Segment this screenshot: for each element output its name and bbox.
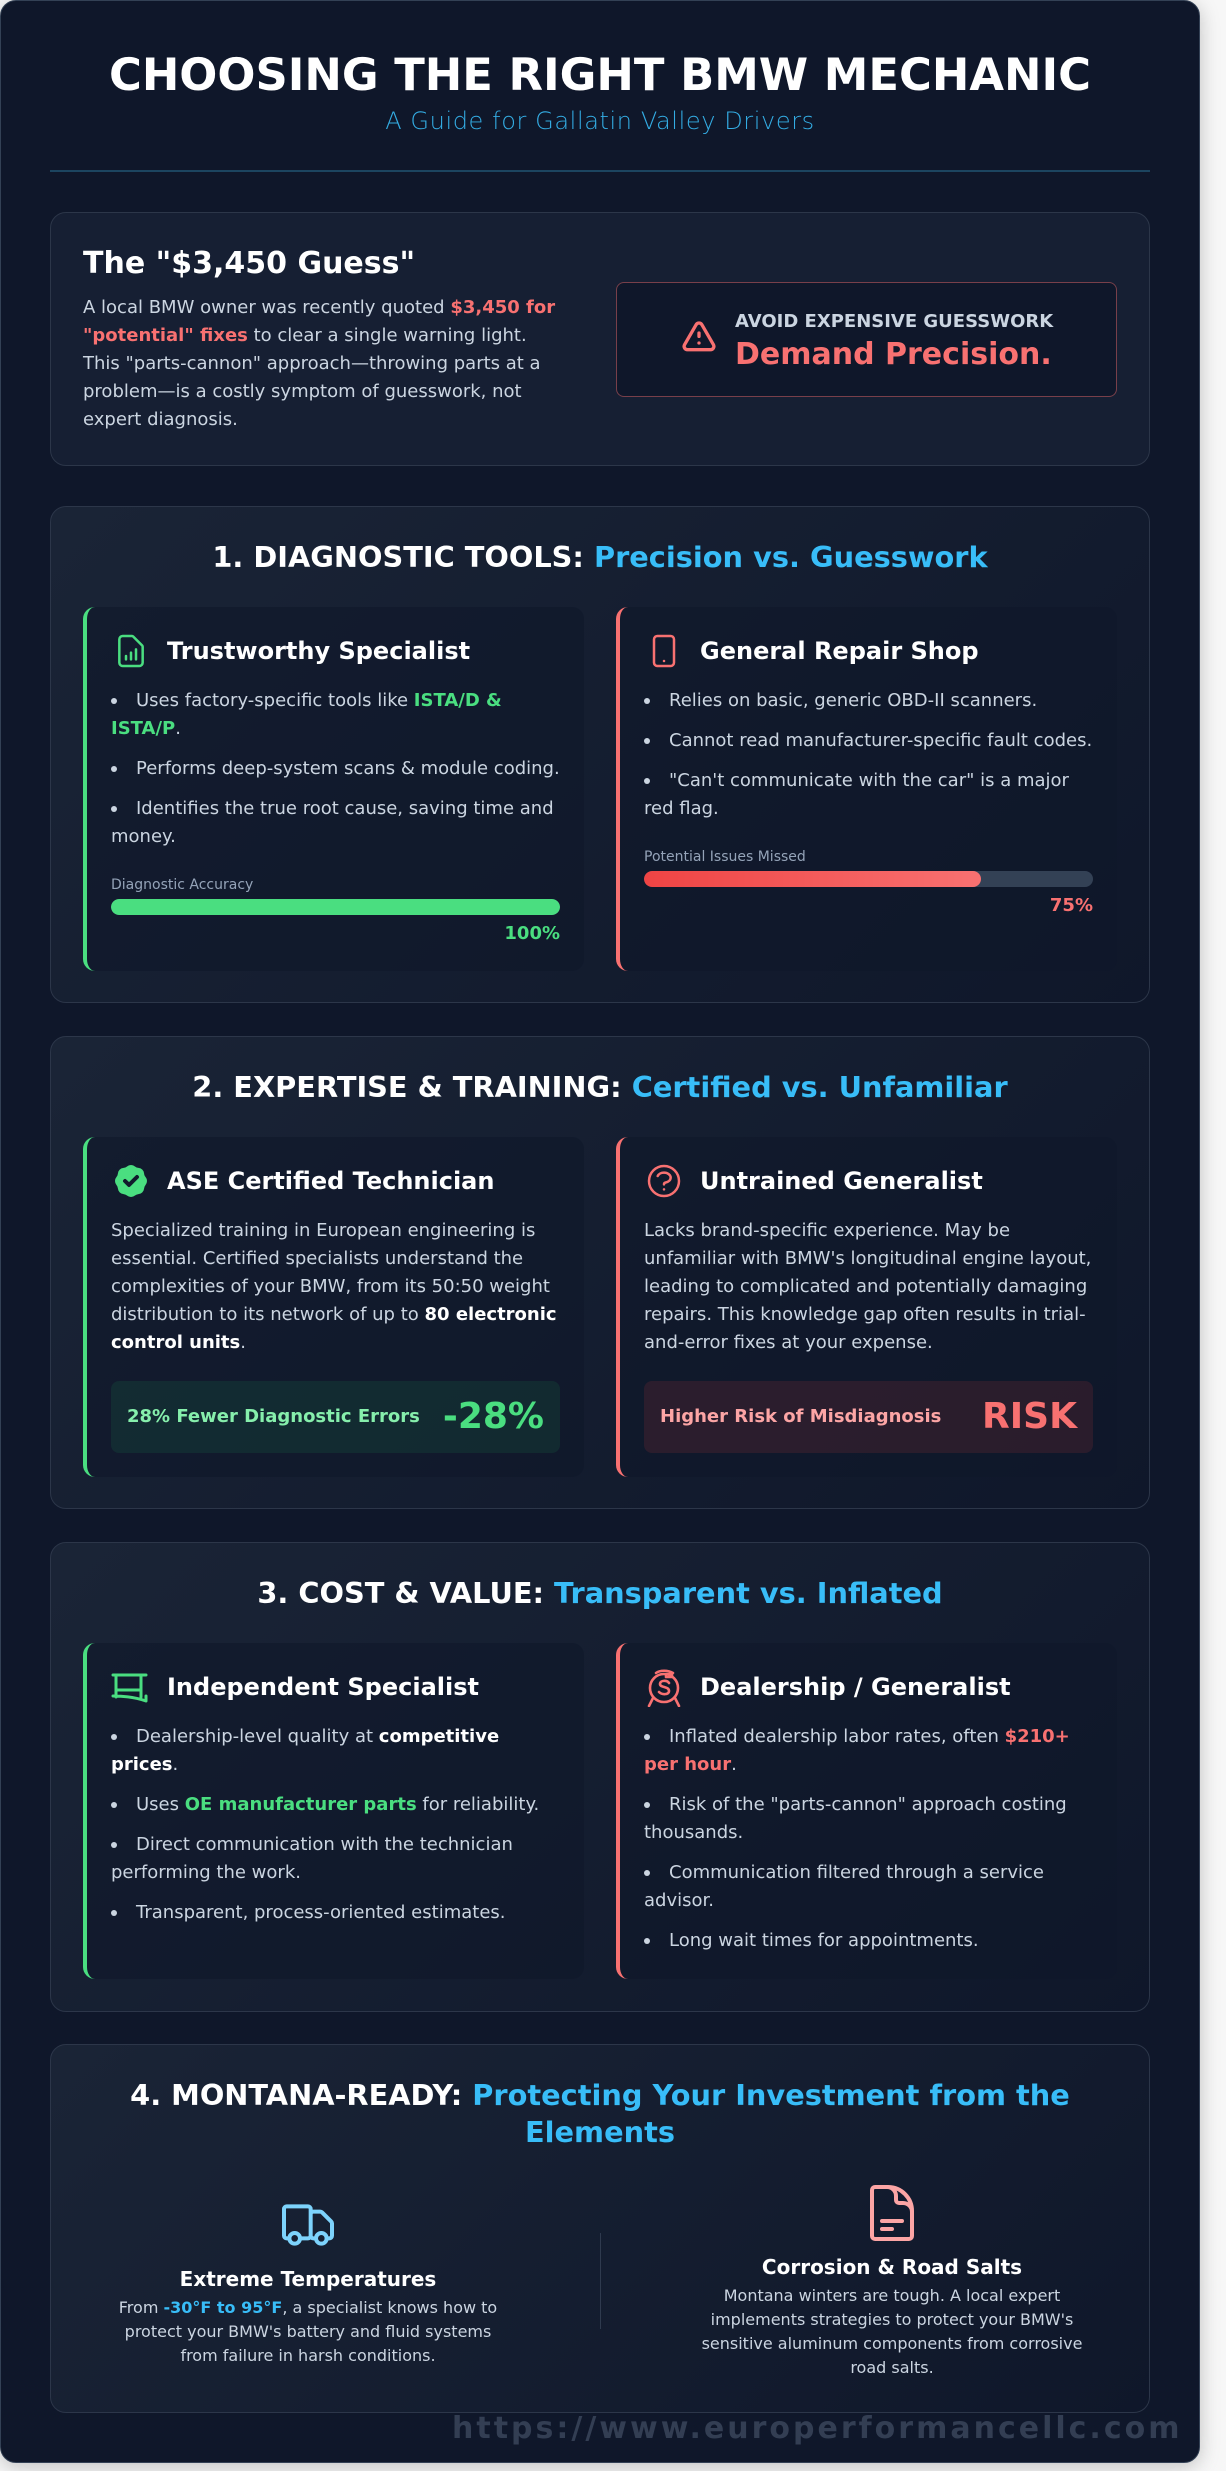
bullet list: Inflated dealership labor rates, often $210+ per hour. [644,1726,1070,1775]
card heading with icon: money tag [648,1670,1011,1707]
progress bar: potential issues missed: 75% [1050,895,1093,916]
column heading: Corrosion & Road Salts [762,2255,1022,2279]
bullet list: Identifies the true root cause, saving time and money. [111,798,554,847]
column text: From -30°F to 95°F, a specialist knows how to protect your BMW's battery and fluid systems from failure in harsh conditions. [119,2298,497,2365]
stat: higher risk of misdiagnosis [644,1381,1093,1453]
column heading: Extreme Temperatures [180,2267,436,2291]
subtitle: A Guide for Gallatin Valley Drivers [385,107,815,135]
section heading: 1. DIAGNOSTIC TOOLS: Precision vs. Guesswork [212,540,988,574]
title: CHOOSING THE RIGHT BMW MECHANIC [109,48,1091,101]
heading: the $3,450 guess: The "$3,450 Guess" [83,246,415,281]
bullet list: Performs deep-system scans & module coding. [136,758,560,779]
card heading with icon: phone: General Repair Shop [700,637,979,665]
panel: the $3,450 guess intro [50,212,1150,466]
card: general repair shop [616,607,1117,971]
card: trustworthy specialist [83,607,584,971]
icon: document [870,2185,914,2241]
card: untrained generalist [616,1137,1117,1477]
column: extreme temperatures [119,2204,497,2365]
card heading with icon: scales: Independent Specialist [167,1673,479,1701]
bullet list [111,1726,539,1923]
stat: higher risk of misdiagnosis: Higher Risk of Misdiagnosis [660,1406,941,1427]
stat: fewer diagnostic errors: 28% Fewer Diagnostic Errors [127,1406,420,1427]
bullet list: Transparent, process-oriented estimates. [136,1902,506,1923]
bullet list: Direct communication with the technician performing the work. [111,1834,513,1883]
icon: truck [282,2204,334,2246]
panel: diagnostic tools [50,506,1150,1003]
stat: higher risk of misdiagnosis: RISK [982,1396,1077,1437]
bullet list: Uses factory-specific tools like ISTA/D & ISTA/P. [111,690,502,739]
panel: cost and value [50,1542,1150,2012]
bullet list: "Can't communicate with the car" is a major red flag. [644,770,1069,819]
card heading with icon: check badge: ASE Certified Technician [167,1167,494,1195]
card heading with icon: report document: Trustworthy Specialist [167,637,470,665]
callout kicker: AVOID EXPENSIVE GUESSWORK [735,311,1053,332]
body text: Lacks brand-specific experience. May be unfamiliar with BMW's longitudinal engine layout, leading to complicated and potentially damaging repairs. This knowledge gap often results in trial-and-error fixes at your expense. [644,1220,1091,1353]
callout headline: Demand Precision. [735,337,1052,372]
panel: expertise and training [50,1036,1150,1509]
bullet list: Dealership-level quality at competitive prices. [111,1726,499,1775]
bullet list: Communication filtered through a service advisor. [644,1862,1044,1911]
stat: fewer diagnostic errors [111,1381,560,1453]
card heading with icon: money tag: Dealership / Generalist [700,1673,1011,1701]
bullet list: Risk of the "parts-cannon" approach costing thousands. [644,1794,1067,1843]
progress bar: potential issues missed [644,849,1093,916]
progress bar: diagnostic accuracy [111,877,560,944]
watermark url: https://www.europerformancellc.com [452,2411,1182,2446]
card: independent specialist [83,1643,584,1979]
card: ase certified technician [83,1137,584,1477]
bullet list [111,690,560,847]
comparison grid [83,1643,1070,1979]
bullet list: Uses OE manufacturer parts for reliability. [136,1794,539,1815]
callout: demand precision [616,282,1117,397]
bullet list [644,1726,1070,1951]
intro text block: A local BMW owner was recently quoted $3,450 for "potential" fixes to clear a single warning light. This "parts-cannon" approach—throwing parts at a problem—is a costly symptom of guesswork, not expert diagnosis. [83,297,555,430]
progress bar: potential issues missed: Potential Issues Missed [644,849,806,865]
section heading: 3. COST & VALUE: Transparent vs. Inflated [257,1576,943,1610]
body text: Specialized training in European engineering is essential. Certified specialists understand the complexities of your BMW, from its 50:50 weight distribution to its network of up to 80 electronic control units. [111,1220,557,1353]
column text: Montana winters are tough. A local expert implements strategies to protect your BMW's sensitive aluminum components from corrosive road salts. [702,2286,1082,2377]
section heading: 4. MONTANA-READY: Protecting Your Investment from the Elements [130,2078,1070,2149]
card heading with icon: question circle: Untrained Generalist [700,1167,983,1195]
stat: fewer diagnostic errors: -28% [443,1396,544,1437]
column: corrosion and road salts [702,2185,1082,2377]
bullet list: Cannot read manufacturer-specific fault codes. [669,730,1092,751]
panel: montana-ready [50,2044,1150,2413]
bullet list [644,690,1092,819]
comparison grid [83,1137,1093,1477]
section heading: 2. EXPERTISE & TRAINING: Certified vs. Unfamiliar [192,1070,1008,1104]
bullet list: Relies on basic, generic OBD-II scanners. [669,690,1037,711]
bullet list: Long wait times for appointments. [669,1930,979,1951]
progress bar: diagnostic accuracy: 100% [504,923,560,944]
comparison grid [83,607,1093,971]
progress bar: diagnostic accuracy: Diagnostic Accuracy [111,877,253,893]
card: dealership generalist [616,1643,1117,1979]
icon: warning triangle [682,321,716,352]
